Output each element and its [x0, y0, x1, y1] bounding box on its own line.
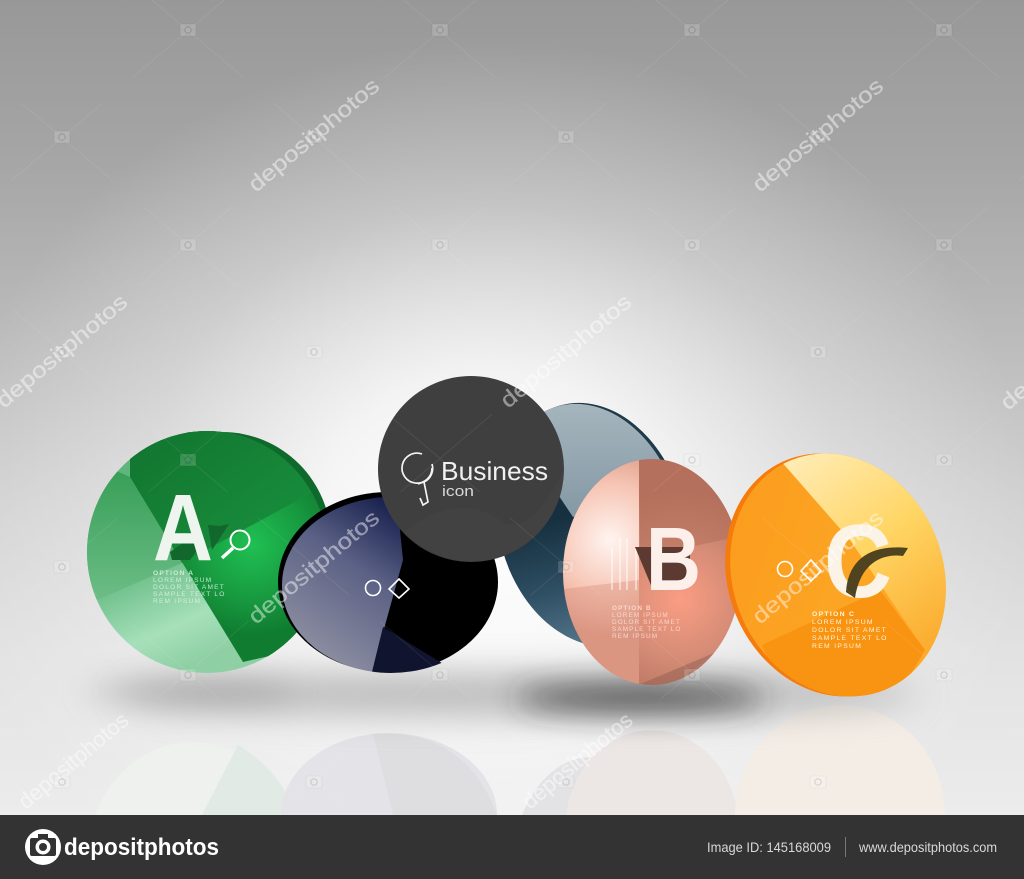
option C text: SAMPLE TEXT LO: [812, 635, 888, 642]
option B text: SAMPLE TEXT LO: [612, 626, 682, 633]
business icon circle: [378, 376, 564, 562]
option A text: LOREM IPSUM: [153, 577, 212, 584]
circle: slate blue: [504, 402, 665, 644]
website: www.depositphotos.com: [858, 839, 997, 855]
option B text: [612, 605, 682, 640]
icons: circle and diamond: [778, 560, 821, 581]
option A text: SAMPLE TEXT LO: [153, 591, 226, 598]
circle B: copper: [563, 459, 735, 685]
letter A with icon: A: [153, 475, 213, 581]
footer logo icon: [25, 829, 61, 865]
option A text: OPTION A: [153, 570, 194, 577]
option A text: REM IPSUM: [153, 598, 201, 605]
navy facets: [282, 497, 442, 673]
watermark: diagonal logos: depositphotos: [243, 505, 384, 629]
option B text: LOREM IPSUM: [612, 612, 669, 619]
watermark: diagonal logos: depositphotos: [747, 505, 888, 629]
watermark: diagonal logos: depositphotos: [13, 707, 133, 814]
orange facets: [762, 454, 946, 696]
green facets: [87, 431, 320, 662]
circle A: green: [87, 431, 326, 673]
subheading: icon: [442, 483, 474, 500]
option C text: [812, 611, 888, 650]
circle C: orange: [725, 454, 946, 696]
watermark: camera marks: [54, 24, 952, 788]
option B text: REM IPSUM: [612, 633, 658, 640]
watermark: diagonal logos: depositphotos: [495, 289, 636, 413]
green front disc: [87, 431, 327, 673]
watermark: diagonal logos: depositphotos: [517, 707, 637, 814]
option C text: DOLOR SIT AMET: [812, 627, 887, 634]
letter C: C: [824, 504, 892, 620]
footer logo text: depositphotos: [64, 834, 219, 861]
reflection of circles: [95, 705, 945, 815]
icons: circle and diamond: [366, 579, 409, 598]
letter B: B: [646, 510, 701, 610]
floor shadow: [85, 674, 920, 714]
watermark: diagonal logos: depositphotos: [747, 73, 888, 197]
option C text: LOREM IPSUM: [812, 619, 874, 626]
icon: vertical lines: [612, 538, 636, 590]
footer bar: [0, 815, 1024, 879]
copper facets: [563, 460, 732, 685]
option B text: DOLOR SIT AMET: [612, 619, 681, 626]
heading: Business: [441, 456, 548, 486]
green back rim: [113, 432, 331, 650]
slate facets: [544, 404, 660, 517]
image id: Image ID: 145168009: [707, 839, 831, 855]
icon: magnifier: [222, 530, 250, 558]
option C text: REM IPSUM: [812, 643, 862, 650]
watermark: diagonal logos: depositphotos: [243, 73, 384, 197]
option B text: OPTION B: [612, 605, 652, 612]
option A text: DOLOR SIT AMET: [153, 584, 225, 591]
option A text: [153, 570, 226, 605]
circle: navy: [278, 492, 498, 673]
option C text: OPTION C: [812, 611, 855, 618]
icon: key: [402, 453, 433, 505]
